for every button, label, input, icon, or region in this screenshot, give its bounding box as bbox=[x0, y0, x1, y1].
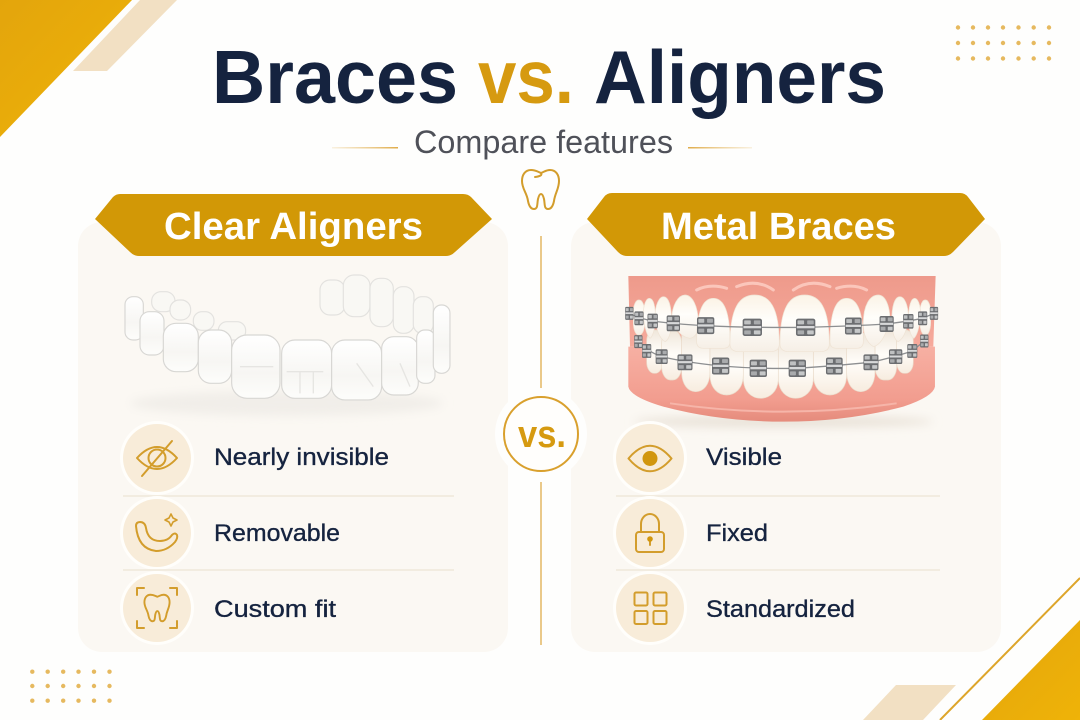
dot grid: top right bbox=[956, 25, 1051, 61]
brackets bbox=[625, 307, 938, 377]
icon: tray with sparkle bbox=[120, 496, 194, 570]
icon: padlock bbox=[613, 496, 687, 570]
icon: tooth in scan frame bbox=[120, 571, 194, 645]
label: Fixed bbox=[706, 520, 768, 547]
label: Visible bbox=[706, 444, 782, 471]
panel background bbox=[78, 222, 508, 652]
dot grid: bottom left bbox=[30, 670, 112, 703]
lower teeth bbox=[647, 330, 913, 398]
banner: metal braces bbox=[587, 193, 985, 256]
feature row: nearly invisible bbox=[120, 421, 389, 495]
title: Aligners bbox=[594, 35, 886, 119]
label: Custom fit bbox=[214, 596, 336, 623]
feature row: custom fit bbox=[120, 571, 336, 645]
label: Nearly invisible bbox=[214, 444, 389, 471]
subtitle with rules: Compare features bbox=[414, 124, 673, 160]
feature row: visible bbox=[613, 421, 782, 495]
label: Removable bbox=[214, 520, 340, 547]
title bbox=[212, 35, 886, 119]
image: clear aligner tray bbox=[125, 275, 450, 416]
upper teeth bbox=[633, 295, 931, 352]
banner: clear aligners bbox=[95, 194, 492, 256]
title: vs. bbox=[478, 35, 574, 119]
corner decoration: bottom right bbox=[863, 578, 1080, 720]
arch wires bbox=[629, 313, 934, 368]
feature row: standardized bbox=[613, 571, 855, 645]
banner: metal braces: Metal Braces bbox=[661, 206, 896, 248]
center divider with vs. badge bbox=[495, 236, 587, 645]
panel: metal braces bbox=[571, 193, 1001, 652]
label: Standardized bbox=[706, 596, 855, 623]
feature row: removable bbox=[120, 496, 340, 570]
title: Braces bbox=[212, 35, 458, 119]
icon: eye bbox=[613, 421, 687, 495]
panel: clear aligners bbox=[78, 194, 508, 652]
banner: clear aligners: Clear Aligners bbox=[164, 206, 423, 248]
icon: tooth bbox=[522, 170, 559, 209]
feature row: fixed bbox=[613, 496, 768, 570]
icon: eye with slash bbox=[120, 421, 194, 495]
corner decoration: top left bbox=[0, 0, 177, 137]
icon: four squares bbox=[613, 571, 687, 645]
panel background bbox=[571, 222, 1001, 652]
image: teeth with metal braces bbox=[625, 276, 938, 428]
center divider with vs. badge: vs. bbox=[518, 414, 566, 456]
